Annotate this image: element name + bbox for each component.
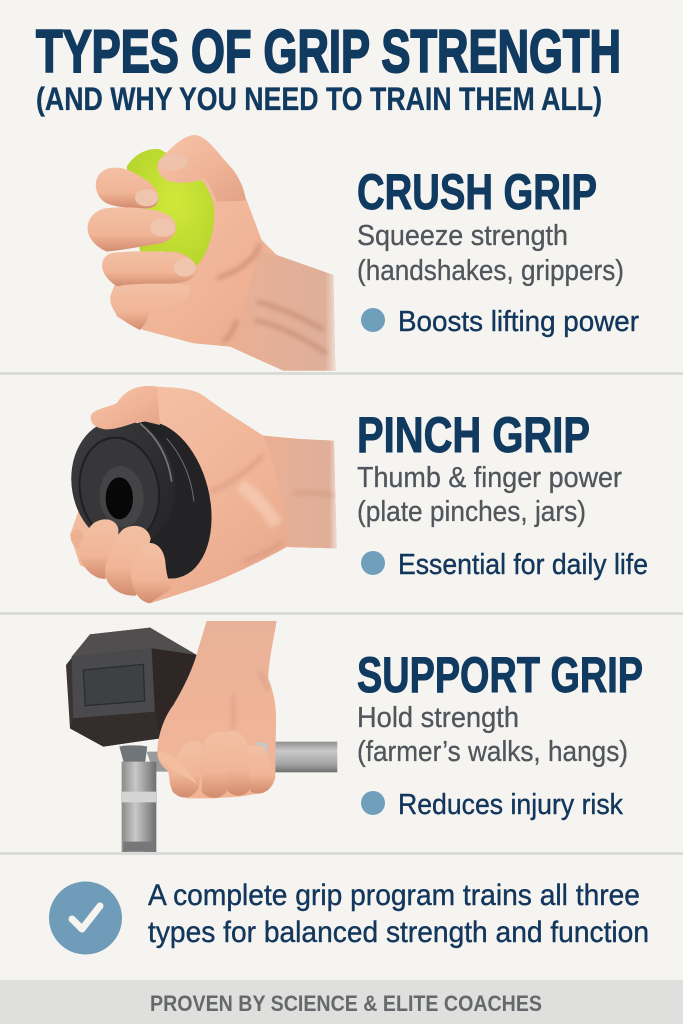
- callout text: A complete grip program trains all three: [148, 879, 640, 912]
- panel: pinch grip: [61, 386, 648, 603]
- description: support grip: Hold strength: [357, 702, 519, 734]
- description: support grip: (farmer’s walks, hangs): [357, 736, 628, 768]
- description: crush grip: Squeeze strength: [357, 220, 568, 252]
- icon: check mark circle: [49, 882, 122, 954]
- illustration: hand holding a dumbbell: [66, 621, 337, 852]
- description: pinch grip: (plate pinches, jars): [357, 496, 586, 528]
- title: [36, 18, 621, 117]
- description: pinch grip: Thumb & finger power: [357, 462, 622, 494]
- callout: complete grip program: [49, 879, 649, 954]
- panel: support grip: [66, 621, 643, 852]
- heading: crush grip: CRUSH GRIP: [357, 164, 597, 220]
- weight plate: [61, 410, 227, 590]
- callout text: types for balanced strength and function: [148, 916, 649, 949]
- description: pinch grip: [357, 462, 622, 528]
- hex head: [66, 628, 197, 747]
- vertical handle: [119, 745, 156, 852]
- footer band: PROVEN BY SCIENCE & ELITE COACHES: [150, 991, 542, 1016]
- description: crush grip: [357, 220, 624, 287]
- bullet: boosts lifting power: Boosts lifting power: [398, 306, 639, 338]
- bullet: reduces injury risk: Reduces injury risk: [398, 789, 623, 821]
- heading: pinch grip: PINCH GRIP: [357, 407, 590, 463]
- description: support grip: [357, 702, 628, 768]
- illustration: hand squeezing a green ball: [88, 135, 335, 371]
- footer band: [0, 980, 683, 1024]
- metal bar: [260, 742, 337, 772]
- bullet: essential for daily life: Essential for daily life: [398, 549, 648, 581]
- illustration: hand pinching a weight plate: [61, 386, 337, 603]
- panel: crush grip: [88, 135, 639, 371]
- description: crush grip: (handshakes, grippers): [357, 255, 624, 287]
